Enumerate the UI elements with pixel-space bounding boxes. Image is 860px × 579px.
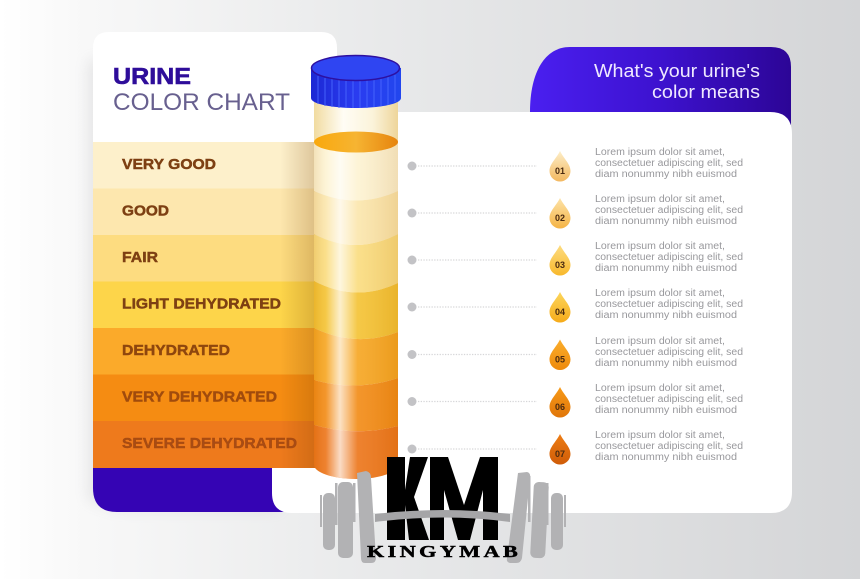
band labels: VERY DEHYDRATED <box>122 390 277 406</box>
droplet 05 <box>550 340 570 370</box>
band labels: FAIR <box>122 250 159 266</box>
description 03: Lorem ipsum dolor sit amet, <box>595 241 725 252</box>
droplet 06: 06 <box>555 402 565 412</box>
KM letters <box>387 457 498 540</box>
description 04: Lorem ipsum dolor sit amet, <box>595 288 725 299</box>
droplet 05: 05 <box>555 354 565 364</box>
panel: left card <box>93 32 337 512</box>
left title: COLOR CHART <box>113 89 290 116</box>
description 03: diam nonummy nibh euismod <box>595 263 737 274</box>
description 04: diam nonummy nibh euismod <box>595 310 737 321</box>
droplet 06 <box>550 387 570 418</box>
droplet 07 <box>550 434 570 464</box>
description 06: consectetuer adipiscing elit, sed <box>595 394 743 405</box>
description 04: consectetuer adipiscing elit, sed <box>595 299 743 310</box>
droplet 04: 04 <box>555 307 565 317</box>
description 07: consectetuer adipiscing elit, sed <box>595 441 743 452</box>
band labels: SEVERE DEHYDRATED <box>122 436 297 452</box>
droplet 07: 07 <box>555 449 565 459</box>
test tube <box>311 56 401 479</box>
droplet 03: 03 <box>555 260 565 270</box>
tube glass <box>314 100 398 150</box>
band labels: LIGHT DEHYDRATED <box>122 296 281 312</box>
panel: header tab <box>530 47 791 125</box>
tab heading: color means <box>652 81 760 102</box>
description 07: diam nonummy nibh euismod <box>595 452 737 463</box>
description 02: diam nonummy nibh euismod <box>595 216 737 227</box>
band labels <box>122 157 297 452</box>
tab heading: What's your urine's <box>594 60 760 81</box>
droplet 01 <box>550 151 570 182</box>
droplet 04 <box>550 292 570 322</box>
tube liquid <box>314 142 398 479</box>
watermark logo <box>320 457 566 563</box>
description 05: consectetuer adipiscing elit, sed <box>595 347 743 358</box>
description 02: consectetuer adipiscing elit, sed <box>595 205 743 216</box>
cap <box>311 56 401 108</box>
description 02: Lorem ipsum dolor sit amet, <box>595 194 725 205</box>
description 07: Lorem ipsum dolor sit amet, <box>595 430 725 441</box>
panel shadow <box>88 60 280 510</box>
left title: URINE <box>113 63 191 89</box>
description 05: Lorem ipsum dolor sit amet, <box>595 336 725 347</box>
description 03: consectetuer adipiscing elit, sed <box>595 252 743 263</box>
left title <box>113 63 290 116</box>
barbell bar <box>375 510 510 522</box>
band labels: GOOD <box>122 204 169 220</box>
color bands <box>93 142 315 468</box>
description 06: diam nonummy nibh euismod <box>595 405 737 416</box>
description 01: consectetuer adipiscing elit, sed <box>595 158 743 169</box>
panel: right card <box>272 112 792 513</box>
band labels: DEHYDRATED <box>122 343 230 359</box>
liquid surface <box>314 132 398 152</box>
droplet 02: 02 <box>555 213 565 223</box>
description 05: diam nonummy nibh euismod <box>595 358 737 369</box>
description 01: diam nonummy nibh euismod <box>595 169 737 180</box>
barbell plates <box>320 471 566 563</box>
droplet 01: 01 <box>555 166 565 176</box>
description 01: Lorem ipsum dolor sit amet, <box>595 147 725 158</box>
description 06: Lorem ipsum dolor sit amet, <box>595 383 725 394</box>
droplet 03 <box>550 245 570 276</box>
droplet 02 <box>550 198 570 229</box>
connector dots and lines <box>408 162 537 454</box>
band labels: VERY GOOD <box>122 157 216 173</box>
KINGYMAB text: KINGYMAB <box>367 542 518 561</box>
